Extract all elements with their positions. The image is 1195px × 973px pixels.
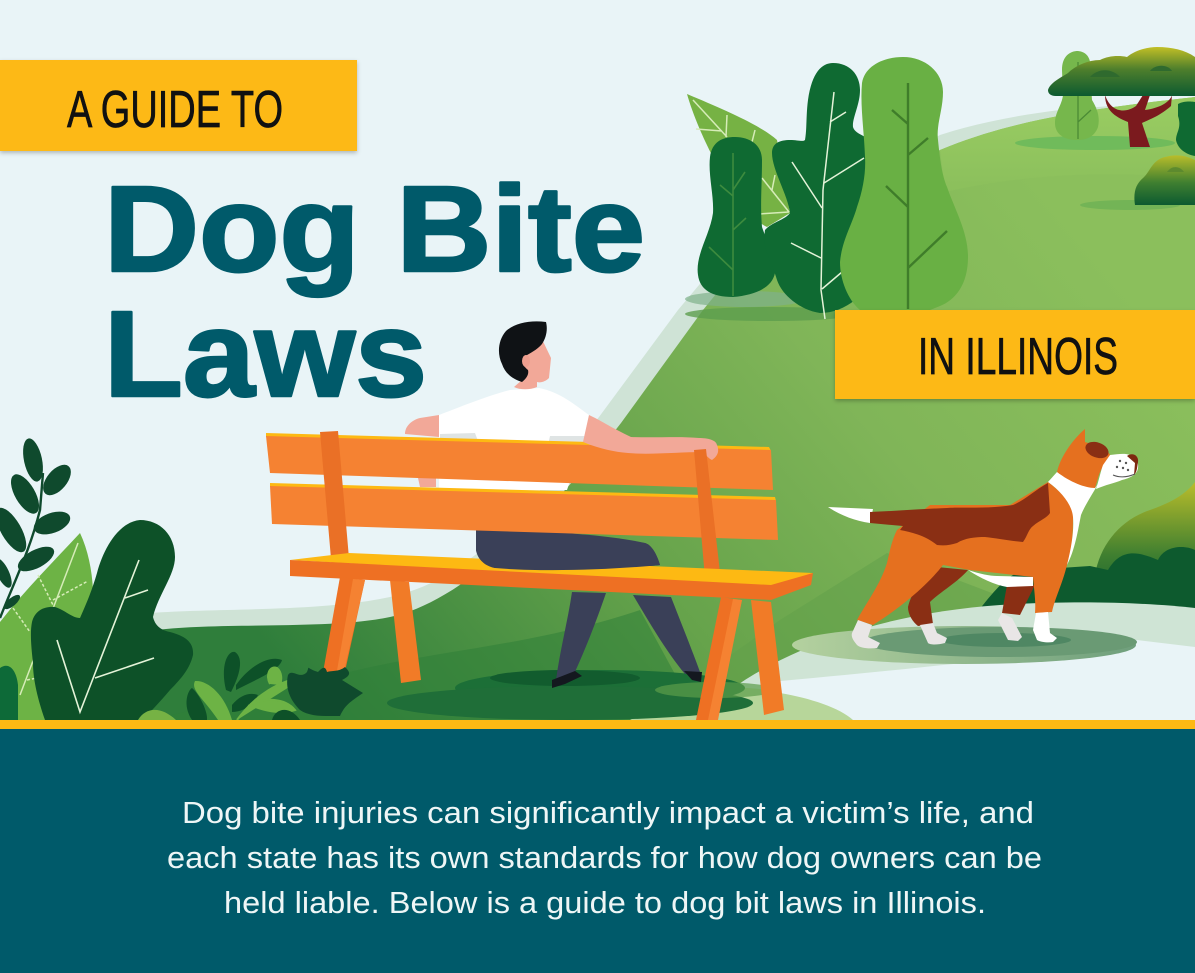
light leaf	[0, 533, 93, 720]
state banner text: IN ILLINOIS	[918, 328, 1118, 386]
bench front-left leg	[322, 577, 365, 687]
intro paragraph: held liable. Below is a guide to dog bit laws in Illinois.	[224, 885, 986, 920]
dog paws	[852, 613, 1022, 648]
intro paragraph: each state has its own standards for how dog owners can be	[167, 840, 1042, 875]
bench upper plank	[266, 433, 773, 490]
dog tail tip	[828, 507, 873, 523]
bench back-right leg	[751, 600, 784, 715]
bench front-right leg	[696, 597, 742, 720]
bench posts	[320, 431, 722, 590]
dog saddle marking	[870, 483, 1050, 545]
path: light walkway	[770, 640, 1195, 720]
background leaf	[687, 94, 790, 227]
distant small tree	[1055, 51, 1099, 140]
bench ground shadow	[387, 670, 775, 720]
main green hill	[150, 97, 1195, 720]
dog far legs	[908, 567, 1035, 626]
bench seat top	[290, 553, 813, 587]
dog head	[1057, 429, 1111, 488]
shirt shading	[440, 433, 585, 447]
dog	[828, 429, 1138, 648]
title: Laws	[104, 286, 427, 422]
teal text panel	[0, 729, 1195, 973]
dog nose	[1127, 454, 1138, 475]
dog chest and collar	[1048, 472, 1098, 565]
small bottom-left plant	[0, 666, 18, 720]
dog body	[857, 482, 1073, 625]
tree shadows	[685, 136, 1180, 321]
man arm behind	[405, 415, 439, 487]
intro paragraph	[167, 795, 1042, 920]
state banner	[835, 310, 1195, 399]
man neck and face	[514, 335, 551, 389]
flat-top tree	[1048, 47, 1195, 147]
pale hill ridge	[90, 106, 1195, 720]
man arm over bench	[583, 415, 718, 460]
bench back-left leg	[390, 580, 421, 683]
yellow divider strip	[0, 720, 1195, 729]
branch leaves	[0, 437, 76, 611]
dog belly	[968, 570, 1033, 587]
bench	[266, 415, 813, 720]
branch stem	[0, 473, 43, 618]
bench lower plank	[270, 483, 778, 540]
man shoes	[552, 671, 702, 688]
dog mouth and whiskers	[1113, 460, 1135, 477]
sky background	[0, 0, 1195, 730]
man hair	[499, 321, 547, 382]
bush behind dog	[975, 482, 1195, 615]
big dark leaf plant	[31, 520, 193, 720]
left foliage	[0, 437, 363, 720]
path: outer pale band	[720, 602, 1195, 720]
man ear	[522, 355, 530, 367]
leaf veins	[20, 543, 78, 695]
light tree 3	[840, 57, 968, 310]
bench seat front	[290, 560, 813, 600]
title: Dog Bite	[104, 161, 645, 297]
dark leaf veins	[57, 560, 154, 712]
small ground plants	[187, 652, 363, 720]
trouser overlap on seat	[476, 532, 660, 570]
dark tree 2	[764, 63, 880, 319]
right olive bush	[1134, 155, 1195, 205]
dog shadow	[792, 626, 1137, 664]
dog muzzle	[1096, 454, 1138, 489]
light green hump	[630, 688, 853, 720]
guide banner	[0, 60, 357, 151]
man	[405, 321, 702, 688]
man trousers upper	[476, 530, 660, 570]
intro paragraph: Dog bite injuries can significantly impact a victim’s life, and	[182, 795, 1034, 830]
man trousers lower	[556, 592, 700, 680]
banner text: A GUIDE TO	[67, 81, 283, 139]
dog eye patch	[1083, 439, 1111, 461]
dark tree 1	[698, 137, 775, 297]
man shirt	[439, 388, 589, 490]
right edge leaf plant	[1176, 102, 1195, 156]
title	[104, 161, 645, 422]
